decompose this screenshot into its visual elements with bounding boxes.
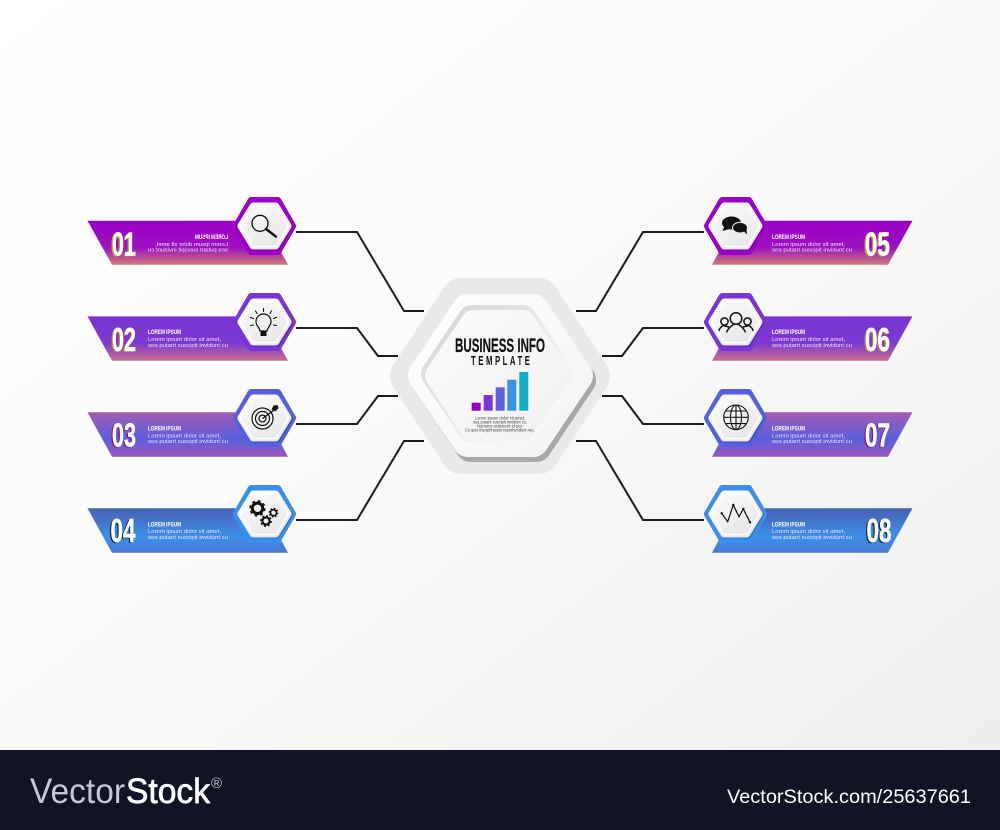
number 06: 06 [865, 321, 890, 358]
panel: 05 [708, 201, 912, 265]
icon: gears [237, 489, 292, 539]
number 07: 07 [864, 418, 888, 454]
panel: 03 [88, 393, 292, 457]
footer logo [30, 772, 222, 811]
center body text: sea putant suscipit invidunt cu. [473, 419, 527, 424]
center body text: Cu quis theophrastus reprehendunt nec. [465, 427, 535, 432]
text 06 [772, 329, 852, 349]
icon: globe [708, 393, 763, 443]
title: BUSINESS INFO [455, 335, 545, 357]
banner 05 [712, 221, 912, 265]
banner 07 [712, 412, 912, 457]
center body text: Nonumy scripserit id per. [477, 423, 523, 428]
text 03: LOREM IPSUM [148, 426, 181, 432]
connector lines [296, 232, 704, 520]
number 01 [110, 226, 136, 264]
text 05: Lorem ipsum dolor sit amet, [772, 242, 845, 248]
banner 02 [88, 316, 288, 361]
text 02: sea putant suscipit invidunt cu [148, 343, 228, 349]
footer logo: Stock [126, 772, 210, 811]
text 07: Lorem ipsum dolor sit amet, [772, 434, 845, 440]
panel: 04 [88, 489, 292, 553]
number 04: 04 [109, 513, 134, 550]
text 04 [148, 522, 228, 541]
footer bar [0, 750, 1000, 830]
text 08: LOREM IPSUM [772, 522, 805, 528]
mirrored text 01: sea putant suscipit invidunt cu [148, 247, 228, 253]
banner 03 [88, 412, 288, 457]
text 03: sea putant suscipit invidunt cu [148, 439, 228, 445]
footer logo: Vector [30, 772, 125, 811]
number 05: 05 [864, 226, 888, 264]
subtitle: TEMPLATE [471, 355, 530, 369]
text 02: LOREM IPSUM [148, 329, 181, 336]
banner 01 [88, 221, 288, 265]
number 03: 03 [112, 416, 136, 454]
text 04: Lorem ipsum dolor sit amet, [148, 529, 221, 535]
panel: 07 [708, 393, 912, 457]
text 06: Lorem ipsum dolor sit amet, [772, 337, 845, 343]
text 06: sea putant suscipit invidunt cu [772, 343, 852, 349]
mirrored text 01 [148, 234, 228, 253]
text 06: LOREM IPSUM [772, 329, 805, 336]
number 08: 08 [865, 513, 890, 550]
text 07: LOREM IPSUM [772, 426, 805, 432]
banner 04 [88, 508, 288, 553]
number 02: 02 [110, 322, 134, 359]
number 07: 07 [865, 416, 890, 454]
panel: 08 [708, 489, 912, 553]
banner 08 [712, 508, 912, 553]
center body text: Lorem ipsum dolor sit amet, [475, 415, 525, 420]
icon: people [708, 297, 763, 347]
text 08 [772, 522, 852, 541]
icon: light bulb [237, 297, 292, 347]
number 01: 01 [112, 226, 136, 262]
outer hexagon ring [410, 298, 590, 454]
panel: 06 [708, 297, 912, 361]
number 06: 06 [864, 322, 888, 359]
text 02 [148, 329, 228, 349]
text 07 [772, 426, 852, 445]
bar chart [472, 372, 528, 411]
footer logo: ® [211, 775, 222, 792]
number 05: 05 [865, 226, 890, 262]
center body text [465, 415, 535, 432]
number 02 [110, 321, 136, 359]
icon: target [237, 393, 292, 443]
text 05: sea putant suscipit invidunt cu [772, 247, 852, 253]
text 02: Lorem ipsum dolor sit amet, [148, 337, 221, 343]
inner hexagon rim [435, 319, 560, 429]
number 04: 04 [110, 512, 136, 549]
number 02: 02 [112, 321, 136, 358]
text 05: LOREM IPSUM [772, 234, 805, 241]
panel: 02 [88, 297, 292, 361]
middle hexagon shadow [427, 315, 580, 446]
text 03 [148, 426, 228, 445]
number 03: 03 [110, 418, 134, 454]
icon: chat bubbles [708, 201, 763, 251]
text 03: Lorem ipsum dolor sit amet, [148, 434, 221, 440]
icon: zigzag line chart [708, 489, 763, 539]
middle hexagon [424, 310, 577, 441]
text 08: sea putant suscipit invidunt cu [772, 535, 852, 541]
text 07: sea putant suscipit invidunt cu [772, 439, 852, 445]
text 08: Lorem ipsum dolor sit amet, [772, 529, 845, 535]
icon: magnifier [237, 201, 292, 251]
central hexagon panel [410, 298, 590, 454]
number 01: 01 [110, 226, 134, 264]
number 03 [110, 416, 136, 454]
banner 06 [712, 316, 912, 361]
mirrored text 01: LOREM IPSUM [195, 234, 228, 241]
inner hexagon face [437, 322, 559, 429]
text 04: LOREM IPSUM [148, 522, 181, 528]
number 08: 08 [866, 512, 892, 549]
text 04: sea putant suscipit invidunt cu [148, 535, 228, 541]
mirrored text 01: Lorem ipsum dolor sit amet, [155, 242, 228, 248]
text 05 [772, 234, 852, 253]
footer image id: VectorStock.com/25637661 [727, 787, 971, 808]
panel: 01 [88, 201, 292, 265]
